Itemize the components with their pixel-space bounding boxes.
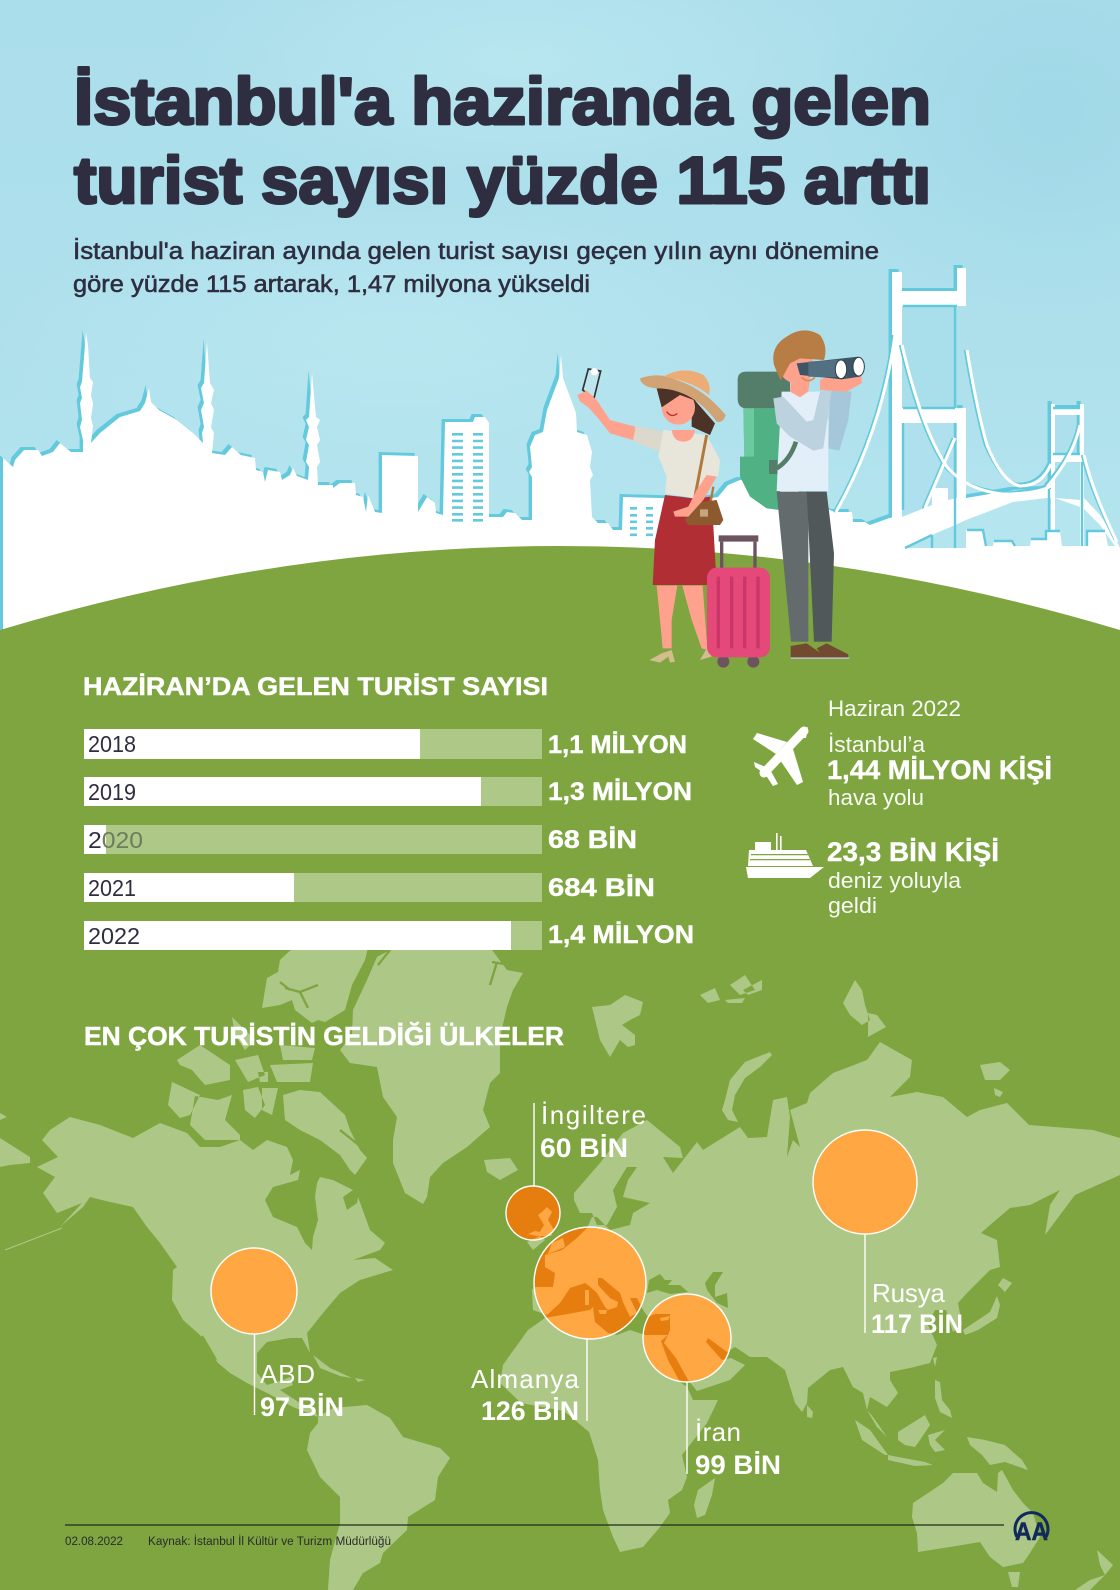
logo: AA: AA (1015, 1518, 1048, 1546)
bubble: ABD (211, 1248, 297, 1334)
bar 2019: 2019 (88, 779, 136, 805)
label: Almanya (471, 1364, 580, 1426)
bar 2019 (84, 777, 692, 806)
bar 2022: 2022 (88, 923, 140, 949)
bar 2018: 1,1 MİLYON (548, 731, 687, 759)
skyline of Istanbul (0, 265, 1120, 640)
label: İran (695, 1417, 781, 1480)
text: sea travel: deniz yoluyla (828, 868, 962, 893)
bar 2021 (84, 873, 655, 902)
circle land and water inside highlighted bubbles (210, 1129, 918, 1383)
label: ABD: 97 BİN (260, 1392, 344, 1422)
panel: June 2022 arrivals (746, 696, 1052, 918)
label: İngiltere: İngiltere (541, 1100, 646, 1130)
bar 2022 (84, 921, 694, 950)
illustration: tourists (577, 330, 865, 668)
man with backpack and binoculars (738, 330, 865, 659)
text: sea travel: geldi (828, 893, 877, 918)
sky background (0, 0, 1120, 640)
subtitle: göre yüzde 115 artarak, 1,47 milyona yükseldi (73, 271, 590, 298)
text: air travel (827, 732, 1052, 810)
label: Rusya: 117 BİN (871, 1309, 963, 1339)
text: air travel: 1,44 MİLYON KİŞİ (827, 755, 1052, 785)
bar 2018: 2018 (88, 731, 136, 757)
text: air travel: İstanbul’a (828, 732, 926, 757)
bar 2020 (84, 825, 637, 854)
heading: Haziran'da gelen turist sayısı: HAZİRAN’DA GELEN TURİST SAYISI (83, 673, 548, 701)
text: air travel: hava yolu (828, 785, 924, 810)
label: İngiltere (540, 1100, 646, 1163)
green ground (0, 546, 1120, 1590)
title: turist sayısı yüzde 115 arttı (74, 143, 931, 217)
label: Almanya: 126 BİN (481, 1396, 579, 1426)
label: Rusya (871, 1278, 963, 1339)
text: sea travel: 23,3 BİN KİŞİ (827, 837, 999, 867)
icon: ship (746, 833, 824, 878)
label: ABD (260, 1359, 344, 1422)
bar 2020: 2020 (88, 827, 143, 853)
label: İran: İran (695, 1417, 741, 1447)
building windows (452, 433, 653, 536)
text: period: Haziran 2022 (828, 696, 961, 721)
bar chart: yearly tourists (84, 729, 694, 950)
label: Rusya: Rusya (872, 1278, 946, 1308)
bridge openings (902, 306, 1115, 548)
woman with hat taking selfie (577, 368, 726, 663)
bridge blue edges (834, 268, 1115, 548)
label: Almanya: Almanya (471, 1364, 580, 1394)
pink suitcase (707, 535, 770, 668)
bubble: Rusya (813, 1130, 917, 1234)
callout leader lines (254, 1103, 865, 1474)
bubble: İran (643, 1294, 731, 1382)
bar 2022: 1,4 MİLYON (548, 921, 694, 949)
title (74, 64, 931, 217)
label: ABD: ABD (260, 1359, 315, 1389)
bar 2020: 68 BİN (548, 826, 637, 854)
bar 2021: 684 BİN (548, 874, 655, 902)
text: sea travel (827, 837, 999, 918)
skyline white silhouette (0, 268, 1120, 640)
label: İran: 99 BİN (695, 1450, 781, 1480)
bubble: İngiltere (506, 1186, 560, 1240)
label: İngiltere: 60 BİN (540, 1133, 628, 1163)
heading: En çok turistin geldiği ülkeler: EN ÇOK TURİSTİN GELDİĞİ ÜLKELER (84, 1021, 564, 1051)
country labels (260, 1100, 963, 1480)
footer (65, 1513, 1048, 1548)
bar 2018 (84, 729, 687, 759)
date: 02.08.2022 (65, 1536, 123, 1548)
world map (0, 948, 1120, 1590)
subtitle (73, 238, 879, 298)
subtitle: İstanbul'a haziran ayında gelen turist sayısı geçen yılın aynı dönemine (73, 238, 879, 265)
bubble: Almanya (534, 1227, 646, 1339)
bar 2021: 2021 (88, 875, 136, 901)
title: İstanbul'a haziranda gelen (74, 64, 931, 138)
skyline blue shadow (0, 265, 1117, 637)
source: Kaynak: İstanbul İl Kültür ve Turizm Müdürlüğü (148, 1535, 391, 1548)
map fine details: fjords (5, 950, 510, 1360)
bridge cables (836, 335, 1117, 542)
icon: airplane (753, 727, 808, 786)
bar 2019: 1,3 MİLYON (548, 778, 692, 806)
